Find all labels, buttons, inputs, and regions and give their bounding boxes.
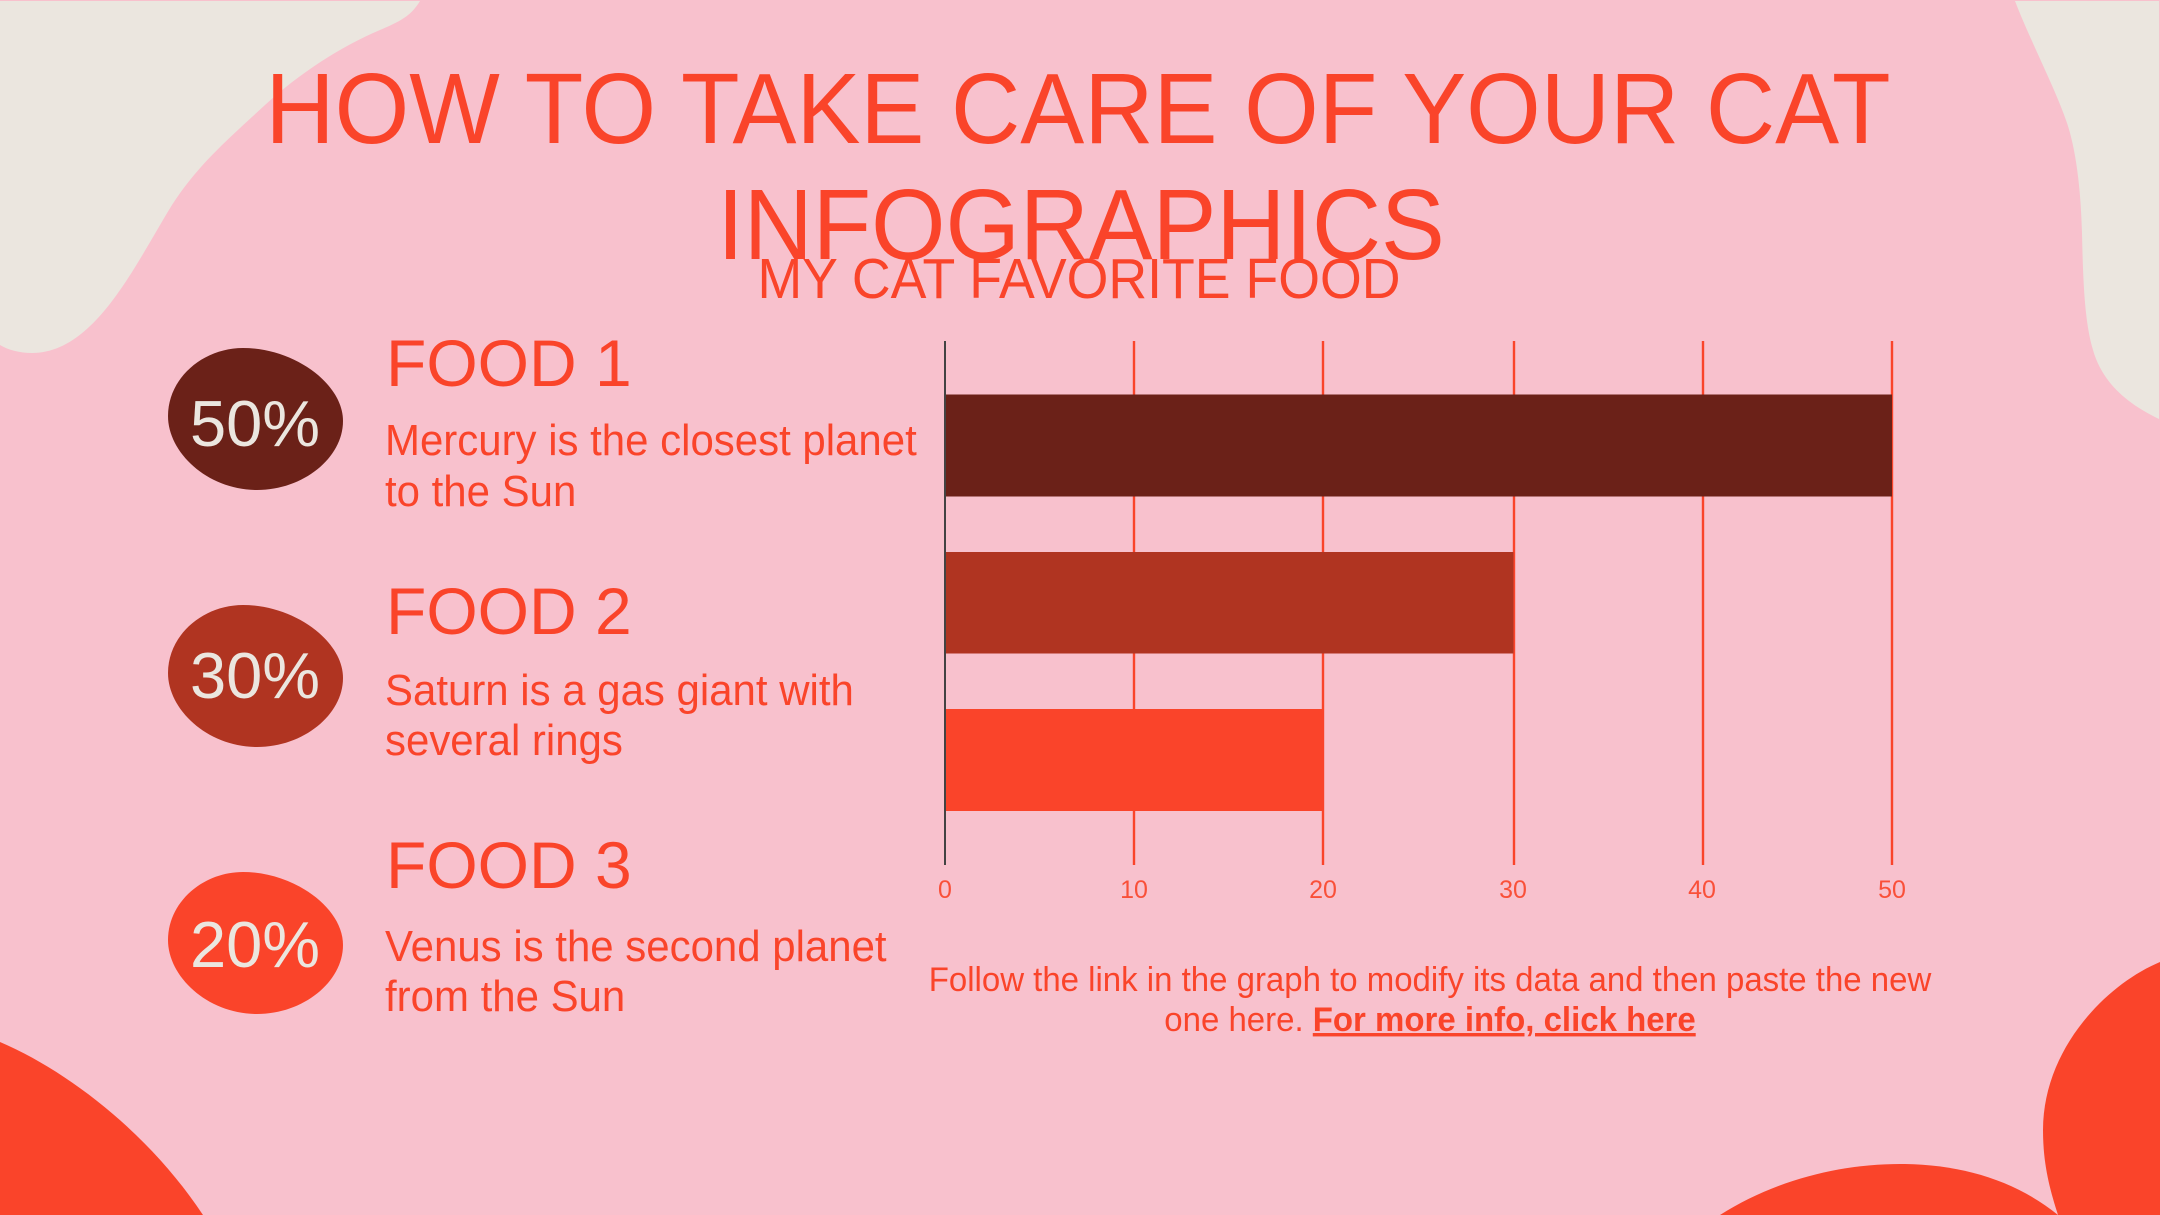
- axis labels: 40: [1688, 876, 1716, 904]
- blob: top left cream: [0, 1, 420, 353]
- bar chart: [938, 341, 1906, 904]
- axis labels: 0: [938, 876, 952, 904]
- percent badge 30%: 30%: [190, 639, 320, 712]
- axis labels: 50: [1878, 876, 1906, 904]
- axis line: [944, 341, 946, 865]
- heading food 2: FOOD 2: [386, 574, 632, 648]
- percent badge 20%: [168, 872, 343, 1014]
- item: food 3: [168, 828, 887, 1021]
- note text with link: For more info, click here: [1313, 1002, 1696, 1039]
- bar: food 3: [945, 709, 1323, 811]
- axis labels: [938, 876, 1906, 904]
- title: HOW TO TAKE CARE OF YOUR CAT: [265, 52, 1891, 164]
- item: food 2: [168, 574, 854, 765]
- percent badge 50%: 50%: [190, 387, 320, 460]
- heading food 1: FOOD 1: [386, 326, 632, 400]
- axis labels: 30: [1499, 876, 1527, 904]
- percent badge 50%: [168, 348, 343, 490]
- item: food 1: [168, 326, 917, 516]
- subtitle: MY CAT FAVORITE FOOD: [757, 247, 1401, 310]
- axis labels: 10: [1120, 876, 1148, 904]
- blob: top right cream: [2015, 1, 2159, 419]
- description food 1: Mercury is the closest planet: [385, 416, 917, 465]
- blob: bottom left red: [0, 1042, 203, 1215]
- description food 2: Saturn is a gas giant with: [385, 666, 854, 715]
- percent badge 30%: [168, 605, 343, 747]
- percent badge 20%: 20%: [190, 908, 320, 981]
- description food 2: several rings: [385, 716, 623, 765]
- title: [265, 52, 1891, 280]
- bar: food 2: [945, 552, 1514, 654]
- description food 1: to the Sun: [385, 467, 576, 516]
- description food 3: Venus is the second planet: [385, 922, 887, 971]
- heading food 3: FOOD 3: [386, 828, 632, 902]
- blob: bottom centre-right red: [1720, 1164, 2058, 1215]
- axis labels: 20: [1309, 876, 1337, 904]
- title: INFOGRAPHICS: [717, 168, 1445, 280]
- note text with link: one here.: [1164, 1002, 1313, 1039]
- note text with link: Follow the link in the graph to modify its data and then paste the new: [929, 962, 1932, 999]
- bar: food 1: [945, 394, 1892, 496]
- description food 3: from the Sun: [385, 972, 625, 1021]
- blob: bottom right red: [2043, 962, 2160, 1215]
